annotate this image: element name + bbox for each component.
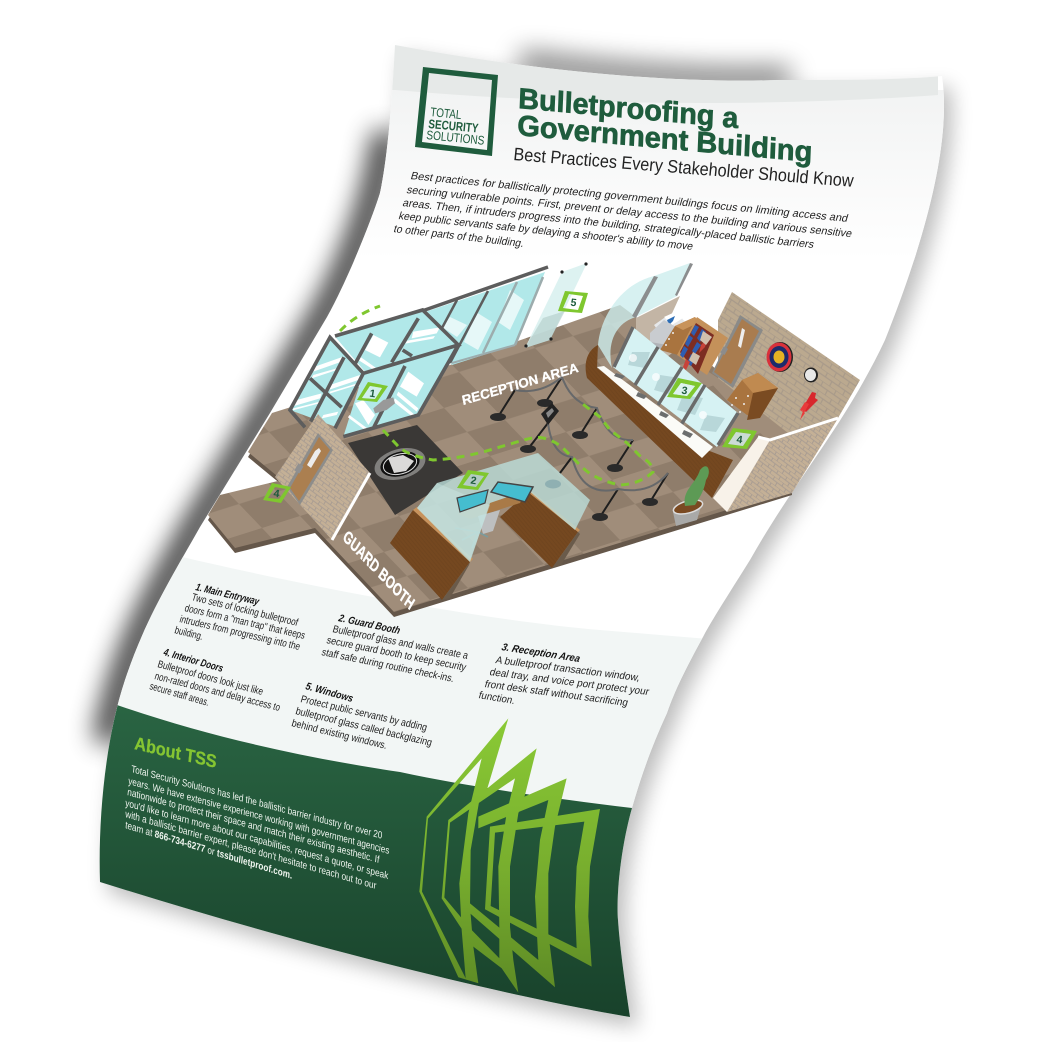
item 1: main entryway [173, 582, 306, 653]
intro paragraph: Best practices for ballistically protecting government buildings focus on limiting access and [409, 170, 850, 225]
about heading: About TSS [134, 732, 218, 772]
curved glass [598, 263, 690, 368]
number badge 5 [558, 291, 588, 313]
second cabinet [727, 373, 778, 420]
subtitle: Best Practices Every Stakeholder Should Know [513, 144, 855, 191]
item 3: reception area: 3. Reception Area [500, 642, 582, 665]
item 5: windows: bulletproof glass called backglazing [294, 706, 434, 749]
left glass [290, 338, 363, 427]
intro paragraph [392, 170, 854, 253]
item 4: interior doors [148, 647, 281, 714]
about paragraph: you'd like to learn more about our capabilities, request a quote, or speak [125, 798, 390, 882]
guard booth [390, 453, 590, 600]
about paragraph [124, 764, 390, 892]
rear glass [335, 312, 457, 372]
front glass [343, 345, 458, 437]
number badge 4 at guard door: 4 [273, 488, 280, 500]
floor [208, 305, 792, 617]
item 3: reception area: front desk staff without sacrificing [483, 679, 630, 709]
deal trays [614, 373, 693, 438]
frame mullions [290, 310, 458, 437]
number badge 4 at guard door [263, 483, 291, 503]
green band [100, 705, 632, 1017]
reception counter [586, 263, 738, 498]
intro paragraph: keep public servants safe by delaying a shooter's ability to move [397, 210, 695, 253]
right brick wall [718, 292, 860, 438]
chevron glass graphic [419, 718, 600, 993]
item 3: reception area: deal tray, and voice port protect your [488, 667, 651, 698]
soft top gradient [340, 90, 960, 260]
item 5: windows: behind existing windows. [290, 718, 388, 752]
item 1: main entryway: intruders from progressing into the [178, 614, 302, 653]
about paragraph: team at 866-734-6277 or tssbulletproof.com. [125, 820, 293, 882]
queue stanchions and ropes [490, 377, 668, 521]
title: Government Building [517, 110, 813, 169]
back office floor [690, 360, 788, 440]
lower brick wall [713, 418, 838, 512]
number badge 5: 5 [570, 297, 577, 309]
printer [648, 312, 690, 352]
number badge 3: 3 [681, 385, 688, 397]
item 1: main entryway: doors form a "man trap" that keeps [183, 603, 306, 642]
back cabinet [660, 317, 700, 355]
glass enclosure [417, 453, 590, 562]
back office door [712, 315, 763, 388]
item 2: guard booth [320, 613, 470, 685]
service window glass [613, 327, 738, 447]
item 5: windows [290, 681, 434, 752]
intro paragraph: areas. Then, if intruders progress into the building, strategically-placed ballistic barriers [401, 197, 816, 251]
item 3: reception area [477, 642, 651, 709]
about paragraph: nationwide to protect their space and match their existing aesthetic. If [127, 787, 380, 866]
item 4: interior doors: secure staff areas. [148, 681, 210, 709]
number badge 1 [357, 382, 388, 402]
potted plant [672, 466, 709, 526]
page shadow [106, 55, 952, 1027]
title [517, 83, 813, 169]
logo: Total Security Solutions: TOTAL [430, 105, 462, 122]
floor label reception area: RECEPTION AREA [461, 360, 580, 408]
wall clock [804, 368, 818, 382]
item 2: guard booth: staff safe during routine check-ins. [320, 647, 455, 685]
logo: Total Security Solutions: SOLUTIONS [426, 128, 485, 148]
item 5: windows: Protect public servants by adding [299, 694, 429, 734]
green dashed route [340, 306, 653, 485]
backglazing window 5 [524, 262, 588, 348]
wood wall right [500, 492, 578, 568]
number badge 2 [457, 470, 489, 490]
item 4: interior doors: non-rated doors and delay access to [153, 671, 281, 714]
entry mat [348, 425, 463, 515]
about paragraph: years. We have extensive experience working with government agencies [128, 776, 390, 857]
wood wall left [390, 510, 470, 600]
page: warped flyer sheet [100, 40, 960, 1017]
wood base [586, 345, 733, 498]
floor label guard booth: GUARD BOOTH [340, 526, 418, 613]
item 1: main entryway: Two sets of locking bulletproof [190, 592, 299, 629]
logo: Total Security Solutions: SECURITY [428, 117, 480, 136]
footer panel: about TSS [100, 705, 632, 1017]
transaction posts [614, 327, 738, 445]
desk [457, 490, 528, 519]
voice ports [629, 354, 637, 362]
item 2: guard booth: 2. Guard Booth [336, 613, 401, 637]
wall seal [766, 342, 793, 372]
item 1: main entryway: 1. Main Entryway [194, 582, 261, 608]
rope [515, 377, 668, 491]
entry brick wall with door [275, 414, 370, 540]
sign stand [541, 403, 559, 425]
item 3: reception area: A bulletproof transaction window, [494, 655, 641, 684]
long window wall [422, 267, 548, 365]
number badge 1: 1 [369, 388, 376, 400]
title: Bulletproofing a [518, 83, 740, 135]
back wall behind reception [636, 296, 690, 362]
fire extinguisher [800, 392, 818, 420]
illustration: isometric floor plan [208, 262, 860, 617]
chair [478, 510, 500, 534]
logo: Total Security Solutions [415, 67, 498, 156]
monitors [457, 490, 488, 512]
number badge 3 [667, 378, 702, 399]
item 2: guard booth: Bulletproof glass and walls create a [331, 624, 470, 662]
item 3: reception area: function. [477, 690, 516, 707]
door handles [373, 397, 395, 413]
mailbox shelf [677, 317, 728, 375]
main entryway glass vestibule [290, 310, 458, 437]
lower text section background [112, 557, 702, 808]
top grey band [380, 40, 938, 103]
number badge 4 near reception: 4 [736, 434, 743, 446]
item 1: main entryway: building. [173, 625, 204, 643]
item 4: interior doors: Bulletproof doors look just like [156, 659, 264, 698]
number badge 4 near reception [722, 428, 757, 449]
item 2: guard booth: secure guard booth to keep security [325, 635, 468, 674]
about paragraph: Total Security Solutions has led the ballistic barrier industry for over 20 [131, 764, 383, 842]
intro paragraph: to other parts of the building. [392, 223, 526, 250]
about paragraph: with a ballistic barrier expert, please don't hesitate to reach out to our [124, 809, 377, 892]
counter top [597, 366, 713, 458]
number badge 2: 2 [470, 475, 477, 487]
intro paragraph: securing vulnerable points. First, prevent or delay access to the building and various sensitive [405, 184, 854, 240]
item 4: interior doors: 4. Interior Doors [161, 647, 224, 675]
item 5: windows: 5. Windows [304, 681, 354, 705]
